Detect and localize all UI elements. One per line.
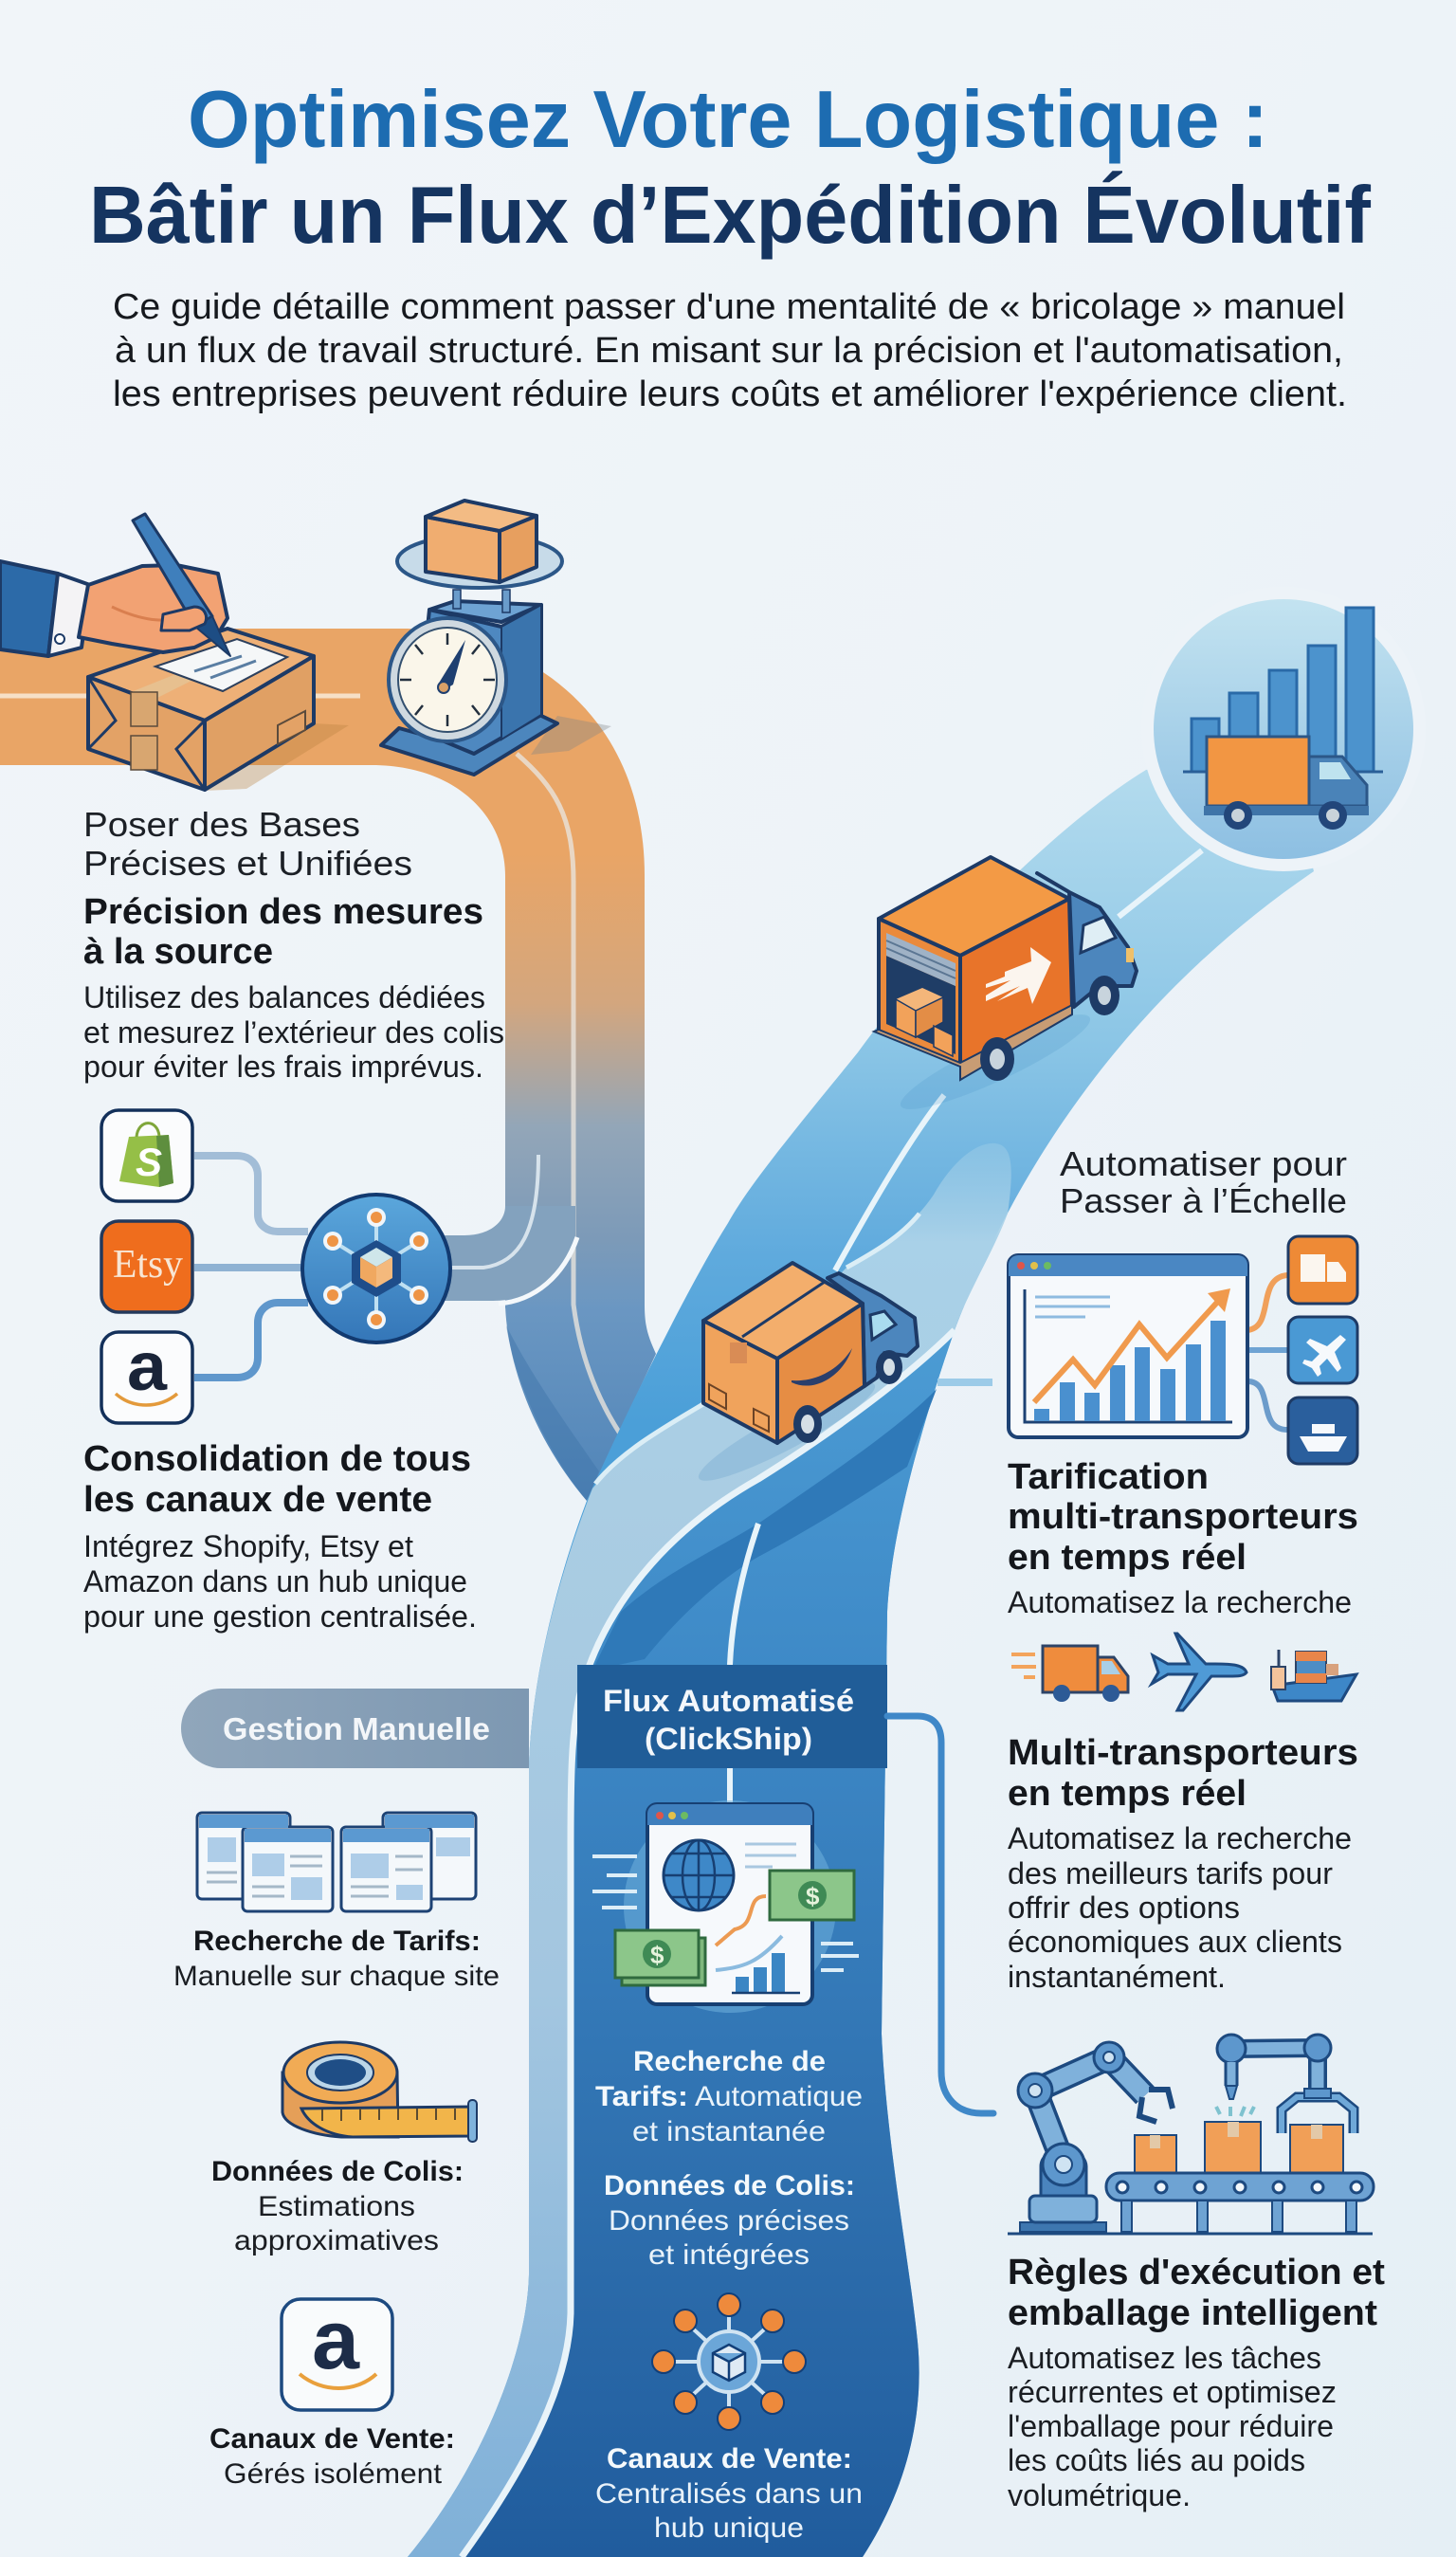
text block: multi-carrier pricing: Tarification: [1008, 1457, 1209, 1497]
intro paragraph: à un flux de travail structuré. En misant sur la précision et l'automatisation,: [115, 331, 1343, 371]
text block: multi-carriers in real time: [1008, 1733, 1358, 1994]
goal circle with truck and bars: [1141, 587, 1426, 871]
connectors from sales channels to hub: [194, 1156, 308, 1378]
icon: parcel truck (middle): [691, 1263, 918, 1493]
text block: consolidation of channels: pour une gestion centralisée.: [83, 1599, 477, 1634]
title: [89, 75, 1372, 261]
text block: measurement precision: à la source: [83, 932, 273, 972]
text block: measurement precision: Utilisez des balances dédiées: [83, 980, 485, 1014]
text block: multi-carriers in real time: Multi-transporteurs: [1008, 1733, 1358, 1773]
text block: multi-carriers in real time: en temps réel: [1008, 1774, 1247, 1814]
text block: rules and smart packaging: l'emballage pour réduire: [1008, 2409, 1334, 2443]
text block: multi-carriers in real time: instantanément.: [1008, 1960, 1226, 1994]
icon: measuring tape: [282, 2042, 477, 2142]
text block: multi-carriers in real time: offrir des options: [1008, 1890, 1240, 1925]
orange road: manual foundations path: [0, 629, 656, 1501]
text block: manual package data: Données de Colis:: [211, 2156, 464, 2187]
icon: Etsy: [101, 1221, 192, 1312]
shaded band: [592, 1389, 937, 1671]
section heading: foundations: Précises et Unifiées: [83, 844, 412, 883]
icon: central hub: [302, 1195, 450, 1342]
text block: multi-carrier pricing: multi-transporteurs: [1008, 1497, 1358, 1537]
icon: robots on packing conveyor: [1008, 2035, 1374, 2234]
text block: automated package data: Données de Colis:: [604, 2170, 855, 2201]
pill: manual management: Gestion Manuelle: [223, 1711, 490, 1746]
dark lane: [462, 1330, 955, 2557]
icon: Shopify: S: [136, 1140, 162, 1184]
text block: measurement precision: et mesurez l’extérieur des colis: [83, 1015, 504, 1050]
icon: automated rate browser: $: [650, 1941, 664, 1969]
icon: delivery truck (top): [874, 857, 1137, 1123]
text block: automated package data: Données précises: [609, 2205, 849, 2237]
intro paragraph: les entreprises peuvent réduire leurs coûts et améliorer l'expérience client.: [113, 374, 1347, 414]
icon: weighing scale with parcel: [381, 501, 562, 775]
main blue road: [408, 749, 1314, 2557]
text block: rules and smart packaging: les coûts liés au poids: [1008, 2443, 1305, 2477]
section heading: automate: Passer à l’Échelle: [1060, 1181, 1347, 1220]
text block: multi-carriers in real time: économiques aux clients: [1008, 1925, 1342, 1959]
title: Bâtir un Flux d’Expédition Évolutif: [89, 171, 1372, 261]
text block: automated sales channels: Canaux de Vente:: [607, 2443, 852, 2475]
icon: manual browser windows: [197, 1813, 476, 1911]
section heading: foundations: Poser des Bases: [83, 805, 360, 844]
text block: automated package data: et intégrées: [648, 2239, 810, 2271]
header: automated flow: (ClickShip): [645, 1722, 812, 1756]
text block: automated rate search: Automatique: [695, 2081, 863, 2112]
pale ribbon: [408, 1143, 1011, 2557]
text block: automated rate search: Tarifs:: [595, 2081, 688, 2112]
connector: header to robot section: [887, 1716, 993, 2113]
text block: consolidation of channels: Intégrez Shopify, Etsy et: [83, 1529, 413, 1563]
header: automated flow: [577, 1665, 887, 1768]
text block: rules and smart packaging: Automatisez les tâches: [1008, 2341, 1321, 2375]
text block: automated sales channels: Centralisés dans un: [595, 2478, 863, 2510]
text block: multi-carriers in real time: Automatisez la recherche: [1008, 1821, 1352, 1855]
text block: automated sales channels: hub unique: [654, 2512, 804, 2544]
text block: rules and smart packaging: récurrentes et optimisez: [1008, 2375, 1337, 2409]
icon: Amazon large: a: [312, 2292, 360, 2386]
header: automated flow: Flux Automatisé: [603, 1684, 854, 1718]
text block: automated package data: [604, 2170, 855, 2271]
icon: Amazon: [101, 1329, 192, 1423]
text block: manual sales channels: Gérés isolément: [224, 2458, 443, 2490]
text block: rules and smart packaging: volumétrique.: [1008, 2478, 1191, 2512]
icon: automated channel hub: [652, 2293, 806, 2430]
pill: manual management: [181, 1689, 529, 1768]
text block: automated sales channels: [595, 2443, 863, 2544]
section heading: automate: Automatiser pour: [1060, 1144, 1347, 1183]
text block: manual package data: Estimations: [258, 2191, 415, 2222]
text block: rules and smart packaging: [1008, 2253, 1385, 2512]
icon: automated rate browser: [592, 1800, 859, 2013]
text block: manual package data: approximatives: [234, 2225, 439, 2256]
text block: rules and smart packaging: Règles d'exécution et: [1008, 2253, 1385, 2292]
text block: automated rate search: [595, 2046, 863, 2147]
dashboard stub line: [937, 1379, 992, 1386]
text block: multi-carrier pricing: en temps réel: [1008, 1538, 1247, 1578]
text block: rules and smart packaging: emballage intelligent: [1008, 2293, 1377, 2333]
icon: hand writing on parcel: [0, 514, 349, 791]
section heading: automate: [1060, 1144, 1347, 1220]
text block: manual sales channels: [209, 2423, 455, 2490]
icon: Etsy: Etsy: [113, 1243, 183, 1287]
text block: measurement precision: [83, 892, 504, 1084]
text block: consolidation of channels: [83, 1439, 477, 1634]
text block: measurement precision: Précision des mesures: [83, 892, 483, 932]
text block: manual sales channels: Canaux de Vente:: [209, 2423, 455, 2455]
connector band from hub to road: [444, 1155, 577, 1304]
text block: manual rate search: Recherche de Tarifs:: [193, 1926, 481, 1957]
text block: consolidation of channels: Amazon dans un hub unique: [83, 1564, 467, 1598]
text block: manual rate search: Manuelle sur chaque site: [173, 1961, 500, 1992]
section heading: foundations: [83, 805, 412, 883]
text block: manual rate search: [173, 1926, 500, 1992]
text block: consolidation of channels: Consolidation de tous: [83, 1439, 471, 1479]
icon: automated rate browser: $: [806, 1882, 820, 1910]
intro paragraph: [113, 287, 1347, 414]
icon: Shopify: [101, 1110, 192, 1201]
intro paragraph: Ce guide détaille comment passer d'une mentalité de « bricolage » manuel: [113, 287, 1345, 327]
title: Optimisez Votre Logistique :: [188, 75, 1268, 165]
text block: automated rate search: et instantanée: [632, 2116, 826, 2147]
text block: consolidation of channels: les canaux de vente: [83, 1480, 432, 1520]
text block: multi-carrier pricing: Automatisez la recherche: [1008, 1585, 1352, 1619]
icons: truck, plane and ship: [1011, 1634, 1356, 1710]
text block: manual package data: [211, 2156, 464, 2256]
text block: multi-carriers in real time: des meilleurs tarifs pour: [1008, 1856, 1333, 1890]
icon: Amazon large: [282, 2292, 392, 2410]
icon: Amazon: a: [127, 1329, 168, 1405]
text block: measurement precision: pour éviter les frais imprévus.: [83, 1050, 483, 1084]
text block: automated rate search: Recherche de: [633, 2046, 826, 2077]
icon: rate dashboard with carriers: [1009, 1236, 1357, 1464]
text block: multi-carrier pricing: [1008, 1457, 1358, 1619]
